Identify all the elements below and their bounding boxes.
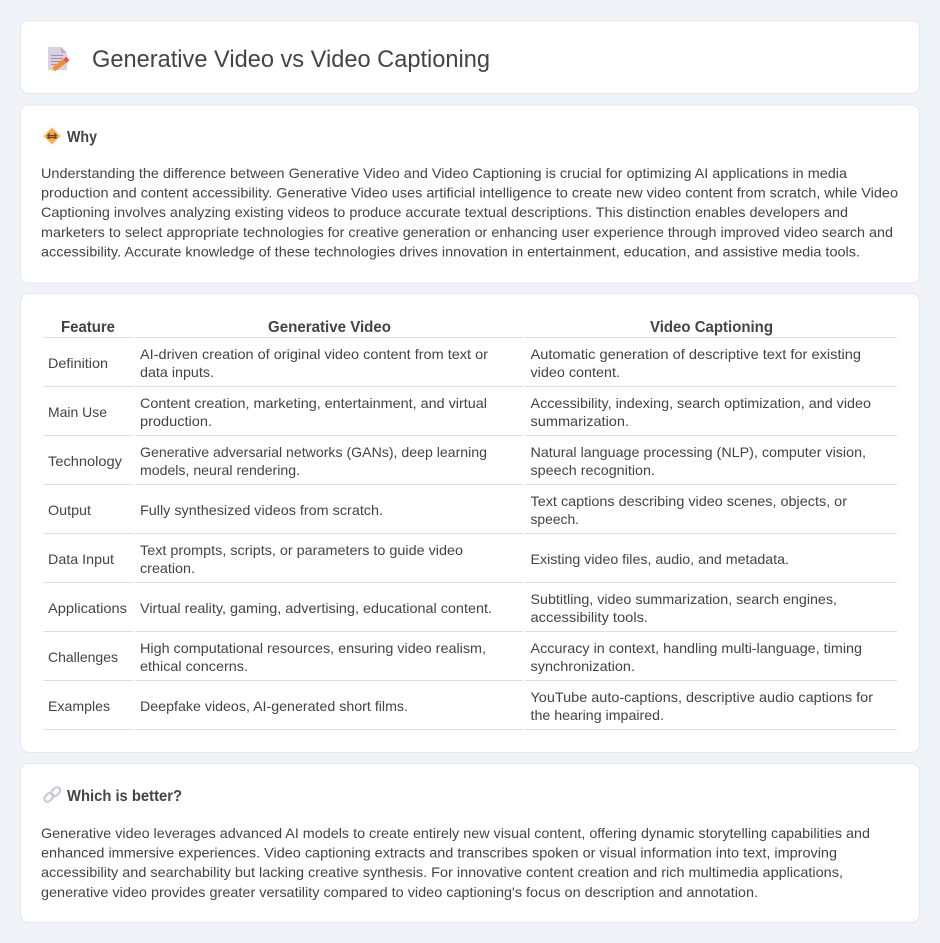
table row: data input: Text prompts, scripts, or parameters to guide video xyxy=(140,542,463,558)
text block: why paragraph: production and content accessibility. Generative Video uses artificial intelligence to create new video content from scratch, while Video xyxy=(41,185,898,201)
panel: why xyxy=(20,105,920,283)
table row: data input xyxy=(43,542,897,583)
table row: definition: data inputs. xyxy=(140,364,214,380)
table header row: Feature xyxy=(61,319,115,336)
table row: technology: speech recognition. xyxy=(530,462,655,478)
table header row: Generative Video xyxy=(268,319,391,336)
table row: definition: Definition xyxy=(48,355,108,371)
table row: examples: Examples xyxy=(48,698,110,714)
table row: technology xyxy=(43,444,897,485)
text block: which is better paragraph xyxy=(41,825,870,900)
text block: why paragraph: marketers to select appropriate technologies for creative generation or enhancing user experience through improved video search and xyxy=(41,224,893,240)
table row: applications: Virtual reality, gaming, advertising, educational content. xyxy=(140,600,492,616)
heading: which is better: Which is better? xyxy=(67,788,182,805)
panel: which is better xyxy=(20,764,920,922)
table row: definition xyxy=(43,346,897,387)
table row: challenges: Challenges xyxy=(48,649,118,665)
table row: technology: models, neural rendering. xyxy=(140,462,300,478)
table row: examples xyxy=(43,689,897,730)
table row: definition: AI-driven creation of original video content from text or xyxy=(140,346,488,362)
table row: output: Output xyxy=(48,502,91,518)
table row: challenges: Accuracy in context, handling multi-language, timing xyxy=(530,640,862,656)
table row: examples: YouTube auto-captions, descriptive audio captions for xyxy=(530,689,873,705)
table row: output xyxy=(43,493,897,534)
text block: why paragraph: Understanding the difference between Generative Video and Video Captioning is crucial for optimizing AI applications in media xyxy=(41,165,847,181)
table row: technology: Natural language processing (NLP), computer vision, xyxy=(530,444,866,460)
text block: why paragraph: accessibility. Accurate knowledge of these technologies drives innovation in entertainment, education, and assistive media tools. xyxy=(41,243,860,259)
table row: main use: production. xyxy=(140,413,212,429)
table header row xyxy=(43,319,897,338)
table row: data input: Existing video files, audio, and metadata. xyxy=(530,551,789,567)
table row: technology: Technology xyxy=(48,453,122,469)
table row: challenges: ethical concerns. xyxy=(140,658,248,674)
table row: main use: Content creation, marketing, entertainment, and virtual xyxy=(140,395,487,411)
table row: challenges: High computational resources, ensuring video realism, xyxy=(140,640,486,656)
table row: applications xyxy=(43,591,897,632)
icon: memo with pencil xyxy=(48,47,68,71)
table row: main use xyxy=(43,395,897,436)
table row: definition: video content. xyxy=(530,364,620,380)
text block: which is better paragraph: accessibility and searchability but lacking creative synthesis. For innovative content creation and rich multimedia applications, xyxy=(41,864,843,880)
table row: applications: accessibility tools. xyxy=(530,609,648,625)
table row: challenges: synchronization. xyxy=(530,658,635,674)
text block: which is better paragraph: generative video provides greater versatility compared to video captioning's focus on description and annotation. xyxy=(41,884,758,900)
table row: main use: Main Use xyxy=(48,404,107,420)
text block: which is better paragraph: Generative video leverages advanced AI models to create entirely new visual content, offering dynamic storytelling capabilities and xyxy=(41,825,870,841)
table row: main use: Accessibility, indexing, search optimization, and video xyxy=(530,395,871,411)
table row: examples: Deepfake videos, AI-generated short films. xyxy=(140,698,408,714)
table row: definition: Automatic generation of descriptive text for existing xyxy=(530,346,861,362)
panel: title header xyxy=(20,20,920,94)
table row: output: Text captions describing video scenes, objects, or xyxy=(530,493,847,509)
table row: applications: Subtitling, video summarization, search engines, xyxy=(530,591,837,607)
table row: data input: creation. xyxy=(140,560,195,576)
table row: output: Fully synthesized videos from scratch. xyxy=(140,502,383,518)
table row: data input: Data Input xyxy=(48,551,114,567)
text block: which is better paragraph: enhanced immersive experiences. Video captioning extracts and transcribes spoken or visual information into text, improving xyxy=(41,845,837,861)
text block: why paragraph xyxy=(41,165,898,259)
table row: applications: Applications xyxy=(48,600,127,616)
table row: examples: the hearing impaired. xyxy=(530,707,664,723)
table header row: Video Captioning xyxy=(650,319,773,336)
title: Generative Video vs Video Captioning xyxy=(92,46,490,73)
icon: warning diamond xyxy=(44,128,60,144)
icon: chain link xyxy=(43,786,62,803)
panel: comparison table xyxy=(20,294,920,752)
table row: output: speech. xyxy=(530,511,579,527)
table row: technology: Generative adversarial networks (GANs), deep learning xyxy=(140,444,487,460)
heading: why: Why xyxy=(67,129,97,146)
table row: main use: summarization. xyxy=(530,413,629,429)
table row: challenges xyxy=(43,640,897,681)
text block: why paragraph: Captioning involves analyzing existing videos to produce accurate textual descriptions. This distinction enables developers and xyxy=(41,204,848,220)
